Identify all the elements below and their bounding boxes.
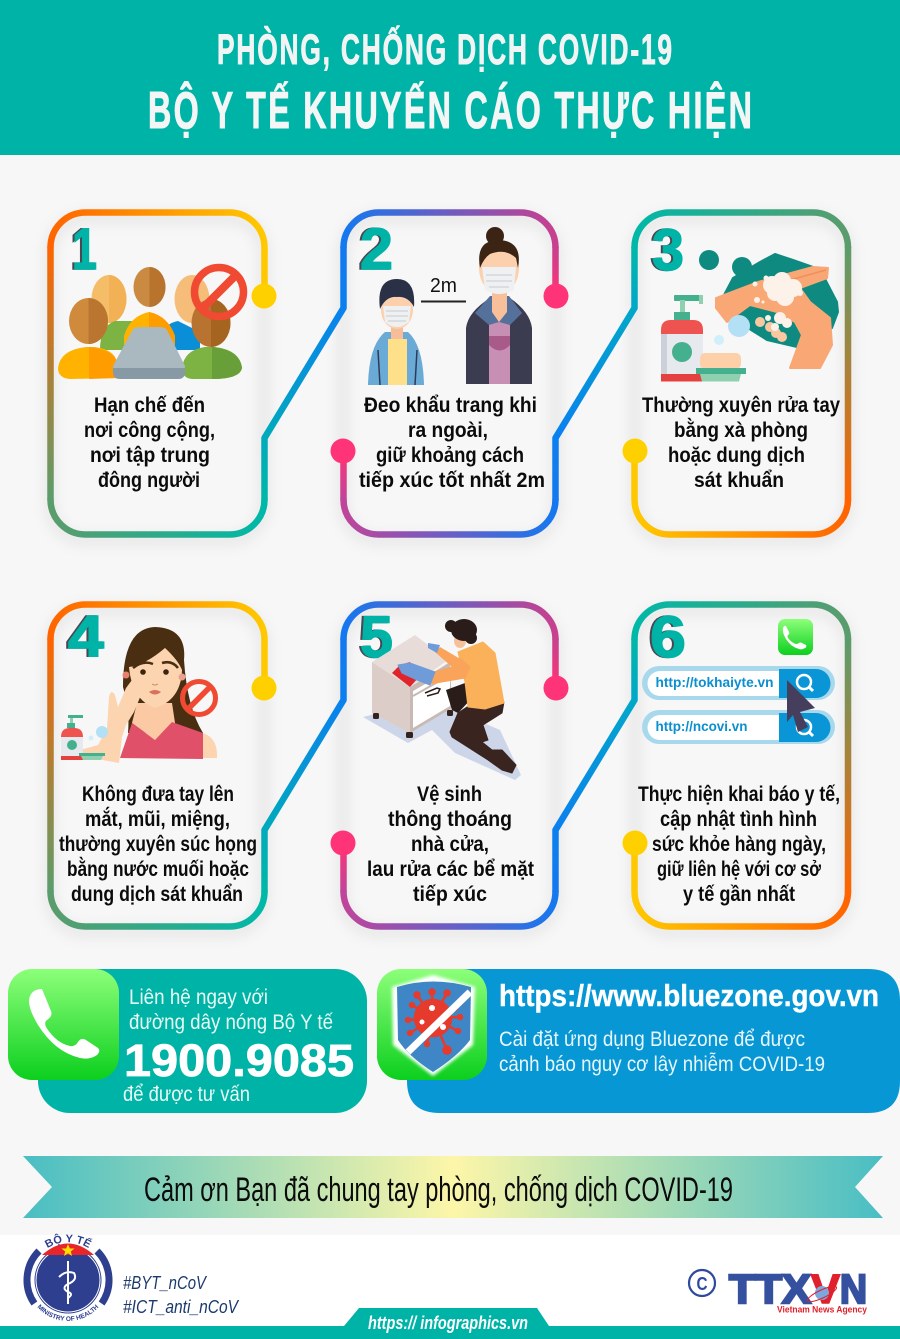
icon: phone [8,969,119,1080]
text: step 1: nơi tập trung [90,444,210,467]
icon: crowd with prohibition sign [58,267,244,379]
website label: https:// infographics.vn [368,1313,528,1333]
text: step 5: tiếp xúc [413,883,487,906]
number 4: 4 [68,604,104,669]
icon: two people 2m apart wearing masks [368,227,532,385]
text: step 4: mắt, mũi, miệng, [85,807,230,831]
search bar: ncovi: http://ncovi.vn [656,718,748,734]
text: step 2: Đeo khẩu trang khi [364,394,537,417]
text: step 2 [359,394,545,492]
text: step 6: sức khỏe hàng ngày, [652,833,826,856]
panel: step 3 [642,218,840,492]
footer [0,1234,900,1339]
text: step 4: dung dịch sát khuẩn [71,883,243,906]
thank-you ribbon [23,1156,883,1218]
logo: TTXVN: N [840,1266,867,1312]
icon: Bluezone shield [377,969,487,1080]
text: step 4 [59,783,257,906]
text: step 2: giữ khoảng cách [376,444,524,467]
text: step 4: Không đưa tay lên [82,783,234,806]
title line 2: BỘ Y TẾ KHUYẾN CÁO THỰC HIỆN [148,81,752,140]
icon: person cleaning a cabinet [363,619,521,780]
number 5: 5 [360,605,393,670]
text: step 3: Thường xuyên rửa tay [642,394,840,417]
logo: Ministry of Health: BỘ Y TẾ [44,1234,93,1248]
text: step 3: hoặc dung dịch [668,444,805,467]
text: step 4: bằng nước muối hoặc [67,857,249,881]
card shadows, row 1 [50,218,848,540]
logo: TTXVN [689,1266,868,1316]
logo: Ministry of Health [23,1234,112,1321]
panel: hotline [8,969,367,1113]
text: step 3: sát khuẩn [694,469,784,492]
number 6: 6 [650,605,686,670]
text: step 1 [84,394,215,492]
text: step 5: Vệ sinh [417,783,482,806]
number 4: 4 [66,604,102,669]
text: step 3: bằng xà phòng [674,418,808,442]
hashtags: #ICT_anti_nCoV [123,1297,240,1317]
connector line, row 1 [50,212,848,534]
number 2: 2 [360,217,393,282]
number 1: 1 [72,217,97,282]
search bar: tokhaiyte [642,666,835,700]
text: step 1: Hạn chế đến [94,394,205,417]
Bluezone text: cảnh báo nguy cơ lây nhiễm COVID-19 [499,1053,825,1076]
title line 1: PHÒNG, CHỐNG DỊCH COVID-19 [217,26,672,74]
header band [0,0,900,155]
text: step 5: thông thoáng [388,808,512,831]
number 3: 3 [652,218,684,283]
number 2: 2 [358,217,391,282]
panel: step 1 [58,217,244,492]
search bar: ncovi [642,710,835,744]
icon: woman not touching her face [61,627,217,763]
logo: TTXVN: TTX [729,1266,811,1312]
panel: step 4 [59,604,257,906]
text: step 5 [367,783,534,906]
text: step 4: thường xuyên súc họng [59,833,257,856]
text: step 1: đông người [98,469,200,492]
hotline text: 1900.9085 [124,1035,354,1086]
text: step 6 [638,783,840,906]
logo: TTXVN: Vietnam News Agency [777,1304,868,1316]
text: step 2: tiếp xúc tốt nhất 2m [359,469,545,492]
logo: TTXVN: C [696,1274,708,1294]
icon: handwashing with soap [661,250,838,382]
text: step 3 [642,394,840,492]
text: step 6: y tế gần nhất [683,883,795,906]
panel: step 5 [358,605,534,906]
card shadows, row 2 [50,610,848,932]
text: step 2: ra ngoài, [408,419,488,442]
text: step 5: nhà cửa, [411,833,489,856]
panel: Bluezone [377,969,900,1113]
number 3: 3 [650,218,682,283]
hotline text: Liên hệ ngay với [129,986,268,1009]
label: 2m: 2m [430,275,457,297]
panel: step 6 [638,605,840,906]
Bluezone text: Cài đặt ứng dụng Bluezone để được [499,1028,805,1051]
hotline text: đường dây nóng Bộ Y tế [129,1011,333,1034]
hashtags: #BYT_nCoV [123,1273,208,1293]
icon: mouse cursor [787,680,815,732]
text: step 6: Thực hiện khai báo y tế, [638,783,840,806]
number 6: 6 [648,605,684,670]
text: step 6: cập nhật tình hình [660,808,817,831]
connector line, row 2 [50,604,848,926]
search bar: tokhaiyte: http://tokhaiyte.vn [656,674,774,690]
text: step 5: lau rửa các bể mặt [367,858,534,881]
logo: TTXVN: V [811,1266,841,1312]
number 1: 1 [70,217,95,282]
text: step 6: giữ liên hệ với cơ sở [657,858,821,881]
icon: green phone app [778,619,813,655]
number 5: 5 [358,605,391,670]
hotline text [123,986,354,1106]
text: step 1: nơi công cộng, [84,419,215,442]
hashtags [123,1273,240,1317]
hotline text: để được tư vấn [123,1083,250,1106]
panel: step 2 [358,217,545,492]
Bluezone text [499,978,879,1076]
logo: Ministry of Health: MINISTRY OF HEALTH [38,1304,98,1321]
